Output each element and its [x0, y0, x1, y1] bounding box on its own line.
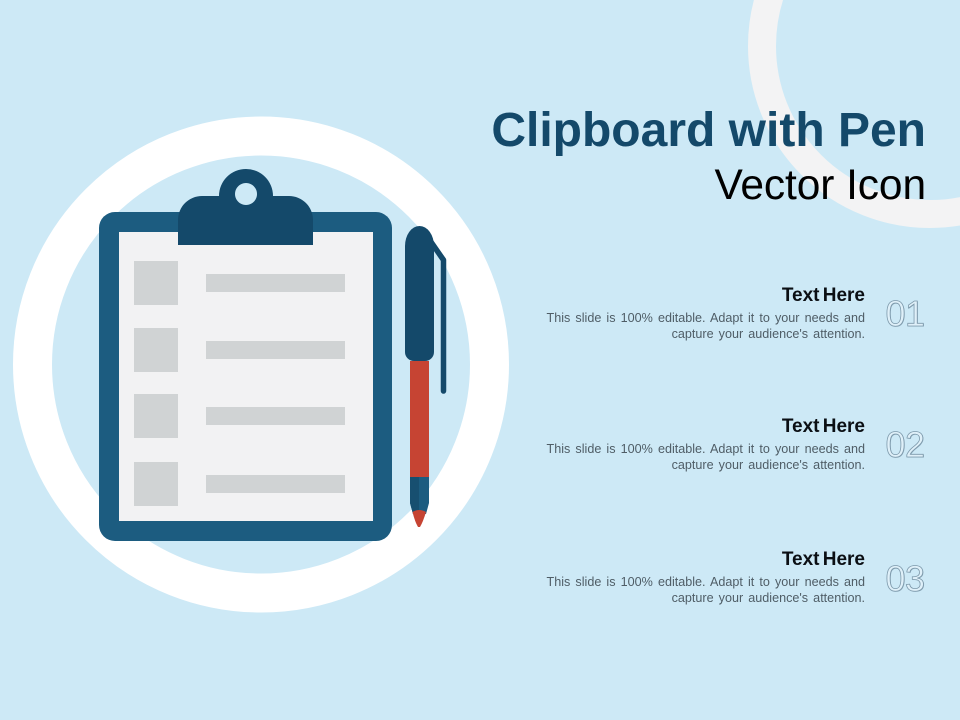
text block 3: capture your audience's attention. — [672, 591, 865, 605]
number 01: 01 — [885, 293, 925, 334]
paper — [119, 232, 373, 521]
text block 2 — [546, 416, 865, 472]
pen barrel — [410, 361, 429, 477]
checklist row 3 — [134, 394, 345, 438]
pen grip shade — [410, 477, 419, 514]
text block 2: Text Here — [782, 416, 865, 437]
white ring — [32, 136, 490, 593]
subtitle: Vector Icon — [714, 162, 926, 209]
clipboard board — [99, 212, 392, 541]
pen cap — [405, 226, 434, 361]
pen clip — [431, 242, 444, 391]
pen — [405, 226, 444, 527]
text block 3 — [546, 549, 865, 605]
text block 2: This slide is 100% editable. Adapt it to your needs and — [547, 442, 865, 456]
text block 1 — [546, 285, 865, 341]
checklist row 1 — [134, 261, 345, 305]
title: Clipboard with Pen — [491, 104, 926, 157]
checklist row 4 — [134, 462, 345, 506]
checklist row 2 — [134, 328, 345, 372]
pen tip — [412, 510, 426, 527]
text block 3: This slide is 100% editable. Adapt it to your needs and — [547, 575, 865, 589]
number 03: 03 — [885, 558, 925, 599]
clip — [178, 169, 313, 245]
pen grip — [410, 477, 429, 514]
text block 1: This slide is 100% editable. Adapt it to your needs and — [547, 311, 865, 325]
text block 1: Text Here — [782, 285, 865, 306]
number 02: 02 — [885, 424, 925, 465]
text block 3: Text Here — [782, 549, 865, 570]
text block 2: capture your audience's attention. — [672, 458, 865, 472]
text block 1: capture your audience's attention. — [672, 327, 865, 341]
